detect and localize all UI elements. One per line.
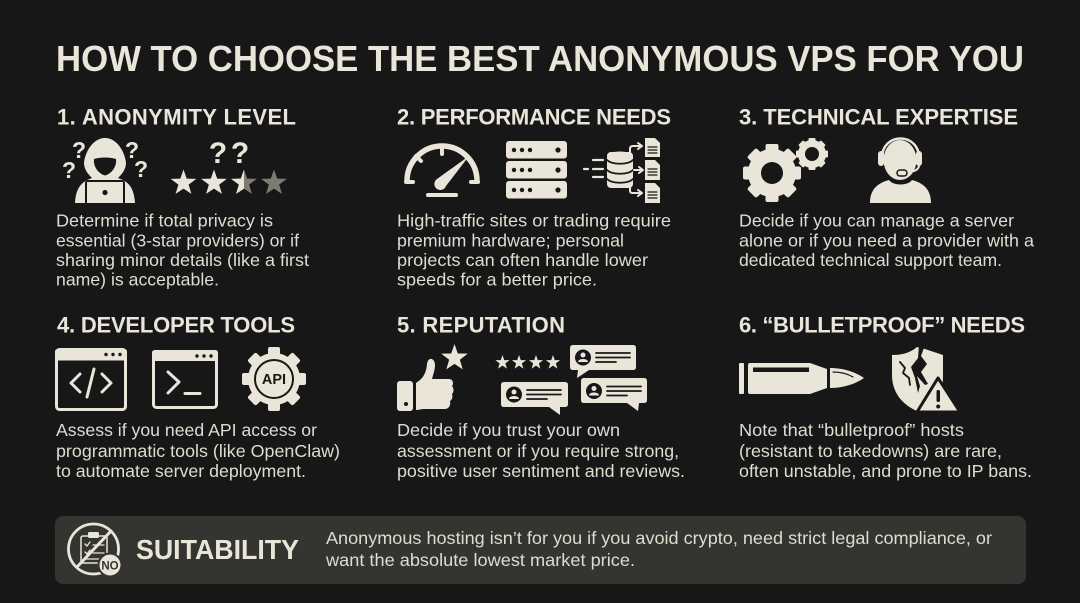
text: performance needs description: premium hardware; personal	[397, 230, 624, 250]
text: suitability description: want the absolute lowest market price.	[325, 550, 635, 570]
icon: server stack	[506, 141, 567, 198]
panel: anonymity level	[56, 104, 309, 290]
heading: bulletproof needs: 6. “BULLETPROOF” NEEDS	[739, 312, 1025, 338]
icon: support agent with headset	[870, 138, 931, 203]
text: developer tools description: to automate server deployment.	[56, 461, 306, 481]
icon: crossed-out checklist with NO badge: NO	[101, 560, 119, 572]
icon: hooded user with laptop: ?	[134, 156, 148, 182]
icon: hooded user with laptop: ?	[125, 137, 139, 163]
text: technical expertise description	[739, 210, 1034, 270]
text: bulletproof needs description	[739, 420, 1032, 481]
text: technical expertise description: Decide if you can manage a server	[739, 210, 1014, 230]
heading: suitability: SUITABILITY	[136, 534, 299, 565]
icon: hooded user with laptop: ?	[62, 157, 76, 183]
heading: developer tools: 4. DEVELOPER TOOLS	[57, 312, 295, 338]
text: performance needs description: High-traffic sites or trading require	[397, 210, 671, 230]
heading: performance needs: 2. PERFORMANCE NEEDS	[397, 104, 671, 130]
icon: database with files	[584, 138, 660, 203]
heading: anonymity level: 1. ANONYMITY LEVEL	[57, 104, 296, 130]
text: developer tools description	[56, 420, 340, 481]
icon: gears	[743, 138, 828, 202]
text: technical expertise description: dedicated technical support team.	[739, 250, 1002, 270]
icon: crossed-out checklist with NO badge	[68, 524, 122, 576]
text: performance needs description: speeds for a better price.	[397, 270, 597, 290]
icon: terminal window	[152, 350, 218, 408]
icon: API gear: API	[262, 372, 286, 388]
icon: bullet	[739, 363, 864, 394]
text: technical expertise description: alone or if you need a provider with a	[739, 230, 1034, 250]
text: suitability description	[325, 528, 992, 570]
text: anonymity level description	[56, 210, 309, 290]
text: performance needs description	[397, 210, 671, 290]
icon: thumbs up with star	[397, 344, 468, 411]
icon: star rating with question marks	[171, 137, 287, 194]
text: reputation description	[397, 420, 685, 481]
text: performance needs description: projects can often handle lower	[397, 250, 648, 270]
icon: hooded user with laptop: ?	[72, 137, 86, 163]
icon: star rating with question marks: ?	[231, 137, 249, 170]
panel: bulletproof needs	[739, 312, 1032, 481]
text: bulletproof needs description: (resistant to takedowns) are rare,	[739, 441, 1002, 461]
text: anonymity level description: name) is acceptable.	[56, 270, 219, 290]
panel: reputation	[397, 312, 685, 481]
heading: technical expertise: 3. TECHNICAL EXPERTISE	[739, 104, 1018, 130]
icon: star rating with question marks: ?	[209, 137, 227, 170]
icon: API gear	[242, 347, 306, 411]
panel: performance needs	[397, 104, 671, 290]
icon: hooded user with laptop	[62, 137, 148, 205]
text: bulletproof needs description: Note that “bulletproof” hosts	[739, 420, 964, 440]
panel: developer tools	[55, 312, 340, 481]
suitability background	[55, 516, 1026, 584]
heading: reputation: 5. REPUTATION	[397, 312, 565, 338]
text: suitability description: Anonymous hosting isn’t for you if you avoid crypto, need strict legal compliance, or	[326, 528, 992, 548]
text: developer tools description: programmatic tools (like OpenClaw)	[56, 441, 340, 461]
text: reputation description: positive user sentiment and reviews.	[397, 461, 685, 481]
text: developer tools description: Assess if you need API access or	[56, 420, 317, 440]
text: anonymity level description: essential (3-star providers) or if	[56, 230, 299, 250]
icon: review stars and speech bubbles	[495, 345, 647, 415]
text: anonymity level description: Determine if total privacy is	[56, 210, 273, 230]
panel: technical expertise	[739, 104, 1034, 270]
panel: suitability	[55, 516, 1026, 584]
text: reputation description: assessment or if you require strong,	[397, 441, 679, 461]
text: bulletproof needs description: often unstable, and prone to IP bans.	[739, 461, 1032, 481]
text: anonymity level description: sharing minor details (like a first	[56, 250, 309, 270]
icon: code window	[55, 349, 127, 410]
icon: speedometer	[406, 146, 478, 197]
text: reputation description: Decide if you trust your own	[397, 420, 620, 440]
title: HOW TO CHOOSE THE BEST ANONYMOUS VPS FOR YOU	[56, 38, 1024, 79]
icon: cracked shield with warning	[892, 345, 960, 412]
